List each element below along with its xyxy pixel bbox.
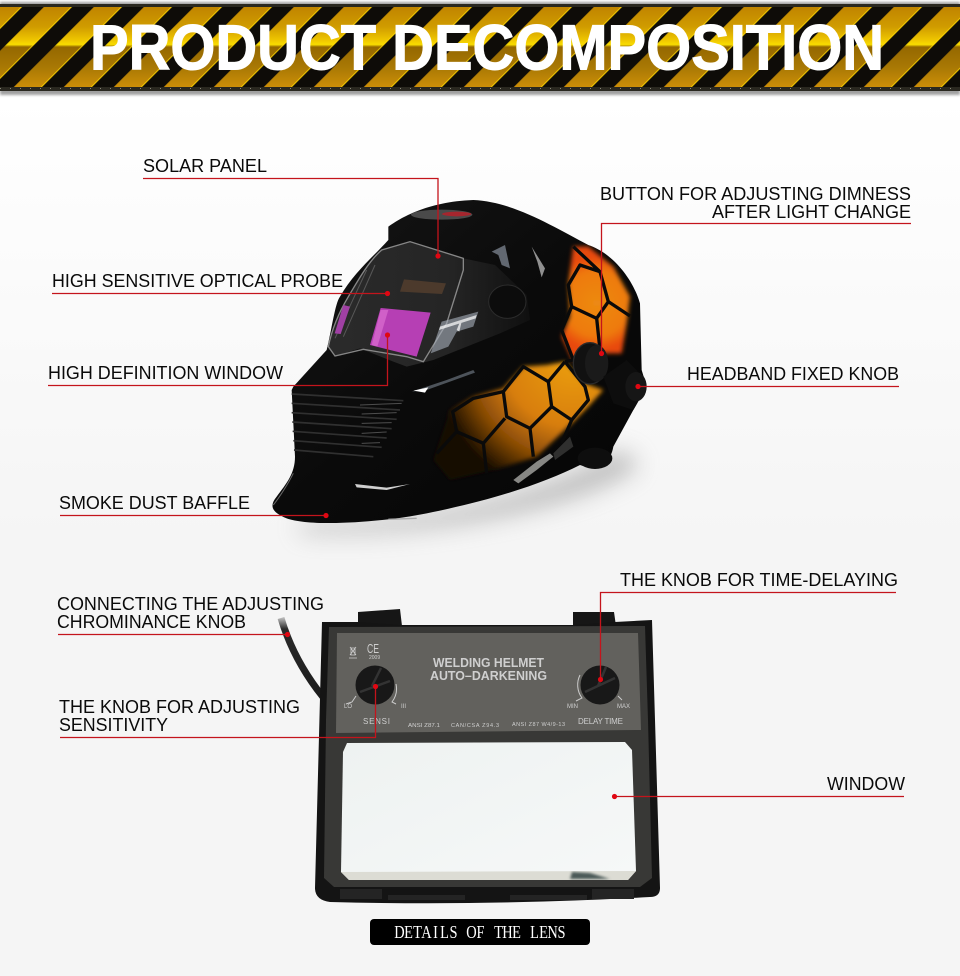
helmet photo illustration (273, 200, 647, 523)
callout: window (612, 774, 905, 799)
callout: time delay knob (598, 570, 898, 682)
callout: headband knob (635, 364, 899, 389)
title text: PRODUCT DECOMPOSITION (90, 12, 884, 84)
title banner (0, 2, 960, 95)
hexagon lines (437, 247, 630, 473)
plate text: ANSI Z87.1 (408, 723, 440, 729)
callout: solar panel (143, 156, 441, 259)
honeycomb pattern (433, 247, 630, 480)
frame bottom grips (340, 889, 634, 900)
plate text: DELAY TIME (578, 717, 623, 726)
callout: dimness button: AFTER LIGHT CHANGE (712, 202, 911, 222)
plate text: LO (344, 704, 352, 710)
frame tabs (358, 609, 616, 626)
callout: high definition window: HIGH DEFINITION WINDOW (48, 363, 283, 383)
gray inner frame (324, 626, 652, 887)
purple window (370, 308, 431, 357)
window bottom edge (341, 871, 636, 880)
caption: details of the lens: DETAILS OF THE LENS (394, 921, 565, 942)
callout: headband knob: HEADBAND FIXED KNOB (687, 364, 899, 384)
solar panel (400, 279, 446, 294)
callout: optical probe (52, 271, 390, 296)
lower orange glow (433, 362, 603, 480)
visor reflections (431, 312, 478, 353)
callout: smoke dust baffle (59, 493, 329, 518)
callout: dimness button: BUTTON FOR ADJUSTING DIMNESS (600, 184, 911, 204)
plate text: 2009 (369, 655, 380, 661)
delay knob (576, 666, 622, 704)
plate text (344, 641, 630, 729)
black outer frame (315, 620, 660, 903)
callout: sensitivity knob (59, 684, 378, 738)
sensitivity knob (346, 666, 397, 704)
adjusting button (573, 343, 608, 384)
plate text: ANSI Z87 W4/9-13 (512, 722, 565, 728)
callout: time delay knob: THE KNOB FOR TIME-DELAYING (620, 570, 898, 590)
helmet shell (273, 200, 647, 523)
plate text: WELDING HELMET (433, 656, 544, 670)
plate text: AUTO–DARKENING (430, 669, 547, 683)
plate text: CAN/CSA Z94.3 (451, 723, 499, 729)
helmet shadow (300, 450, 640, 533)
callout: high definition window (48, 332, 390, 386)
callout: smoke dust baffle: SMOKE DUST BAFFLE (59, 493, 250, 513)
callout: sensitivity knob: THE KNOB FOR ADJUSTING (59, 697, 300, 717)
callout: window: WINDOW (827, 774, 905, 794)
plate text: SENSI (363, 717, 390, 726)
shell highlights (412, 370, 475, 392)
lens window (341, 742, 636, 880)
headband knob (603, 360, 647, 410)
lens cartridge (315, 609, 660, 903)
callout: dimness button (599, 184, 911, 356)
plate text: MIN (567, 704, 578, 710)
callout: sensitivity knob: SENSITIVITY (59, 715, 168, 735)
vent slats (292, 394, 403, 457)
plate text: III (401, 704, 406, 710)
callout: optical probe: HIGH SENSITIVE OPTICAL PROBE (52, 271, 343, 291)
plate text: CE (367, 641, 379, 656)
upper orange glow (562, 247, 630, 362)
callout: chrominance knob: CONNECTING THE ADJUSTING (57, 594, 324, 614)
callout: chrominance knob: CHROMINANCE KNOB (57, 612, 246, 632)
clear visor shield (328, 242, 530, 367)
side knob on visor (489, 285, 526, 318)
callout: chrominance knob (57, 594, 324, 637)
plate text: MAX (617, 704, 630, 710)
rear headband (578, 448, 612, 469)
logo badge (411, 210, 472, 220)
callout: solar panel: SOLAR PANEL (143, 156, 267, 176)
caption: details of the lens (370, 919, 590, 945)
lens cable (281, 618, 323, 697)
icon: disposal symbol (349, 647, 357, 658)
control plate (336, 633, 641, 733)
